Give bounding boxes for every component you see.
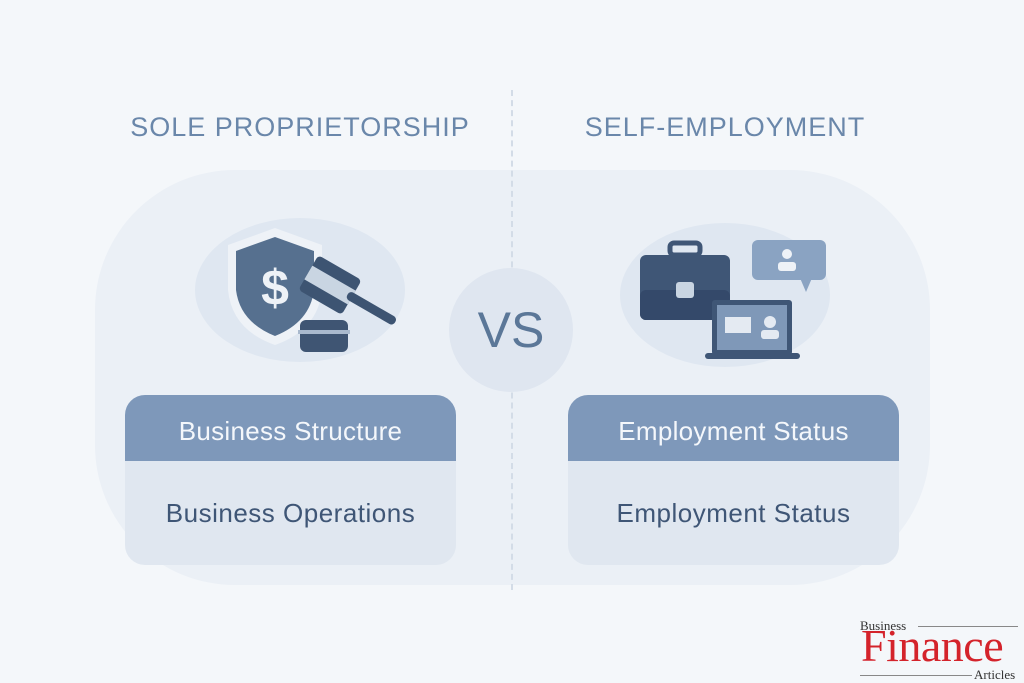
logo: Business xyxy=(860,618,906,633)
card header xyxy=(568,395,899,461)
VS circle xyxy=(449,268,573,392)
card header: Business Structure xyxy=(179,416,402,446)
card body: Business Operations xyxy=(166,498,415,528)
card: business structure xyxy=(125,395,456,565)
icon: shield and gavel: $ xyxy=(261,260,289,316)
background panel xyxy=(95,170,930,585)
logo: Finance xyxy=(861,620,1003,671)
VS circle: VS xyxy=(478,302,544,358)
logo: Articles xyxy=(974,667,1015,682)
card header: Employment Status xyxy=(618,416,849,446)
title: self-employment: SELF-EMPLOYMENT xyxy=(585,112,865,142)
card body: Employment Status xyxy=(617,498,850,528)
card header xyxy=(125,395,456,461)
divider xyxy=(511,90,513,590)
icon: shield and gavel xyxy=(195,218,405,362)
icon: briefcase, chat and laptop xyxy=(620,223,830,367)
card: employment status xyxy=(568,395,899,565)
title: sole proprietorship: SOLE PROPRIETORSHIP xyxy=(130,112,470,142)
